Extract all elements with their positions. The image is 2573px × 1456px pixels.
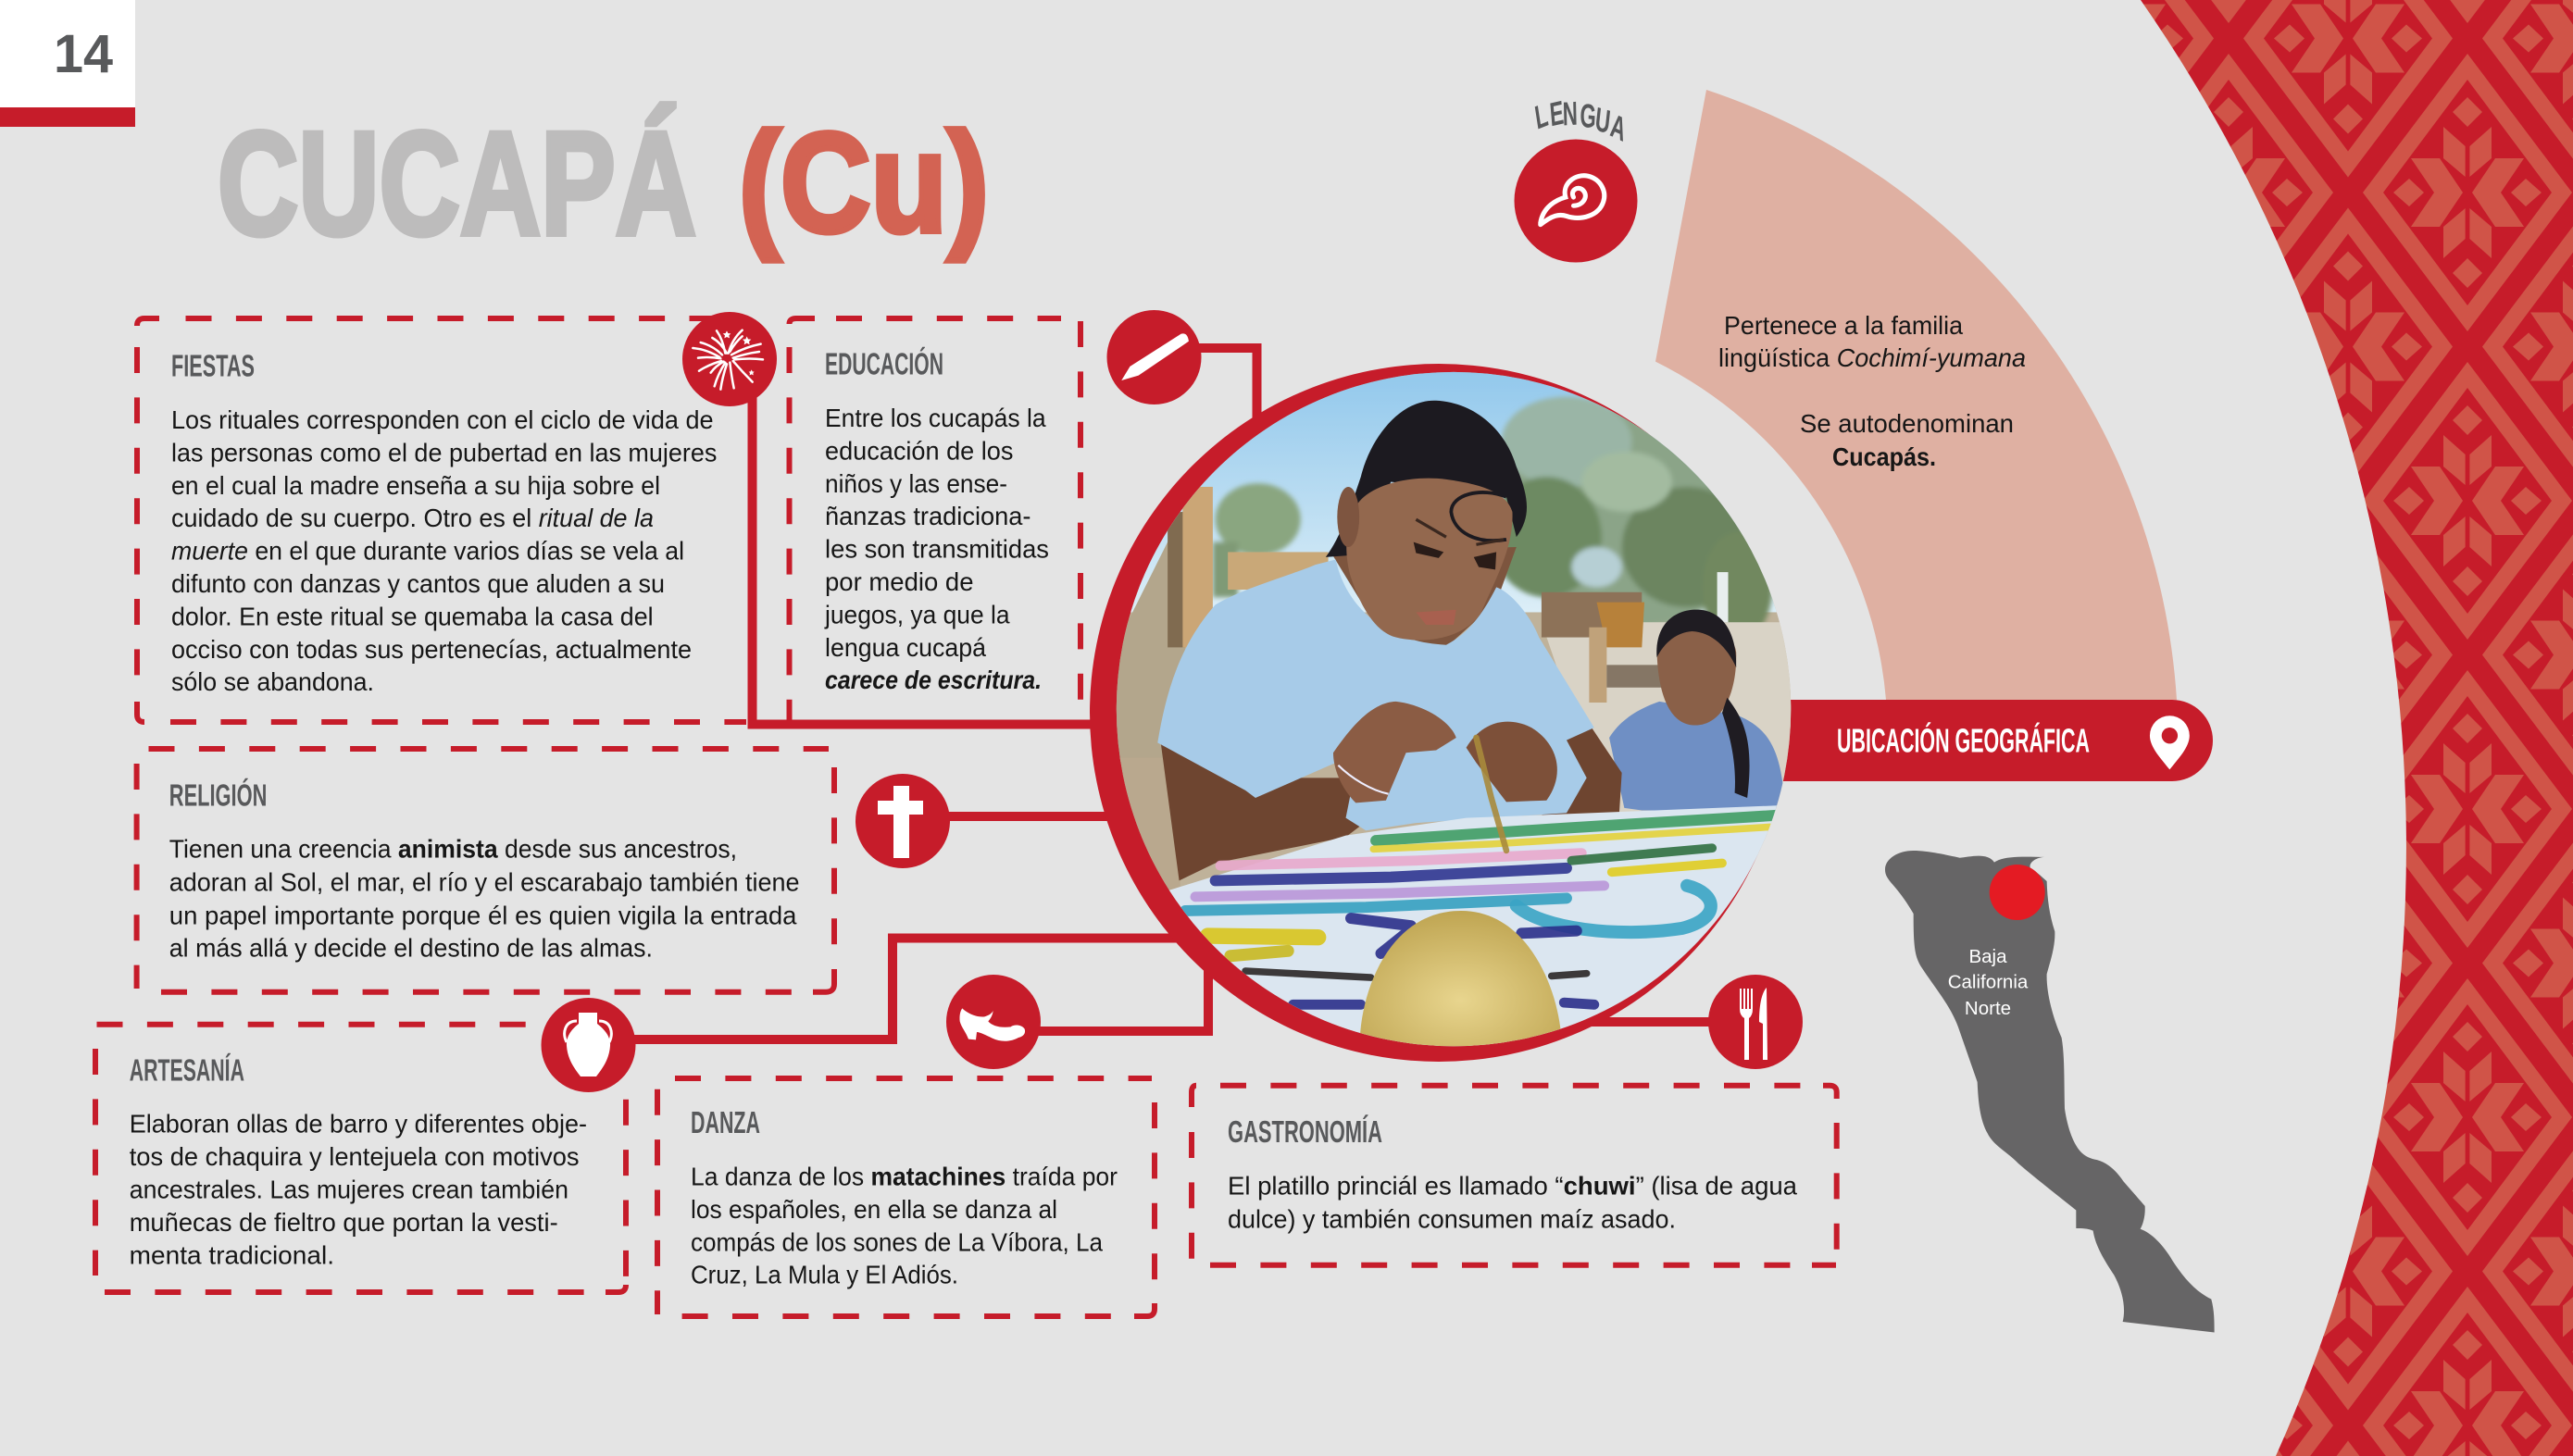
heading: artesanía: ARTESANÍA [130,1053,244,1088]
text: fiestas: occiso con todas sus pertenecías, actualmente [171,635,692,664]
text: artesanía: menta tradicional. [130,1241,334,1270]
map marker [1990,865,2045,920]
banner: ubicación geográfica [1759,700,2213,781]
panel: gastronomía [1192,1086,1837,1265]
icon: amphora [541,998,635,1092]
text: fiestas [171,405,717,696]
text: educación: juegos, ya que la [824,600,1010,628]
text: fiestas: dolor. En este ritual se quemaba la casa del [171,602,654,630]
connectors to the photo [630,348,1713,1039]
page number tab: 14 [54,24,113,84]
background: red woven pattern band [2074,0,2573,1456]
text: fiestas: sólo se abandona. [171,667,374,696]
text: religión: un papel importante porque él es quien vigila la entrada [169,901,797,929]
text: religión: Tienen una creencia animista desde sus ancestros, [169,835,737,864]
page number tab [0,0,135,127]
map: Baja California Norte [1885,851,2215,1333]
title: (Cu) [739,104,989,262]
text: fiestas: difunto con danzas y cantos que aluden a su [171,569,665,598]
text: educación: Entre los cucapás la [825,404,1046,432]
text: fiestas: en el cual la madre enseña a su hija sobre el [171,471,660,500]
panel: religión [137,749,834,992]
text: lengua [1718,311,2026,471]
text: danza [691,1163,1118,1289]
text: danza: compás de los sones de La Víbora, La [691,1227,1104,1256]
icon: pencil [1107,310,1202,404]
text: lengua: lingüística Cochimí-yumana [1718,343,2026,372]
panel: artesanía [95,1025,626,1292]
heading: educación: EDUCACIÓN [825,346,943,381]
title: CUCAPÁ [218,101,696,266]
heading: fiestas: FIESTAS [171,348,255,383]
photo: woman and girl beading at a table [1090,364,1792,1062]
text: educación: lengua cucapá [825,633,987,662]
text: educación: educación de los [825,436,1013,465]
panel: fiestas [137,318,746,722]
map label: California [1948,972,2029,992]
text: gastronomía: El platillo princiál es llamado “chuwi” (lisa de agua [1228,1172,1798,1201]
text: lengua: Cucapás. [1832,442,1936,471]
text: fiestas: muerte en el que durante varios días se vela al [171,537,684,566]
background trees and yard [1213,396,1772,642]
heading: lengua: LENGUA [1532,94,1629,149]
text: educación: por medio de [825,567,974,596]
heading: religión: RELIGIÓN [169,778,267,813]
banner: ubicación geográfica: UBICACIÓN GEOGRÁFICA [1837,720,2090,759]
heading: danza: DANZA [691,1105,760,1139]
text: educación: ñanzas tradiciona- [825,502,1031,530]
text: gastronomía: dulce) y también consumen maíz asado. [1228,1205,1676,1234]
text: educación [824,404,1049,694]
text: artesanía: ancestrales. Las mujeres crean también [130,1176,568,1203]
text: fiestas: cuidado de su cuerpo. Otro es el ritual de la [171,504,654,532]
panel: lengua sector [1655,90,2177,700]
text: danza: La danza de los matachines traída por [691,1163,1118,1191]
panel: educación [789,318,1080,720]
table [1168,805,1780,1049]
text: educación: niños y las ense- [825,469,1007,498]
girl [1609,610,1785,811]
map label: Baja [1968,946,2007,967]
text: religión [169,835,800,963]
icon: cross [856,774,950,868]
text: lengua: Pertenece a la familia [1724,311,1964,340]
map label: Norte [1965,998,2011,1019]
icon: fork and knife [1708,975,1803,1069]
text: religión: adoran al Sol, el mar, el río y el escarabajo también tiene [169,868,800,896]
beads [1185,738,1775,1004]
gourd [1360,911,1562,1049]
woman [1157,401,1622,880]
text: danza: los españoles, en ella se danza al [691,1195,1057,1224]
text: fiestas: Los rituales corresponden con el ciclo de vida de [171,405,714,434]
icon: fireworks [682,312,777,406]
heading: gastronomía: GASTRONOMÍA [1228,1114,1382,1149]
text: educación: les son transmitidas [825,535,1049,564]
icon: dance shoe [946,975,1041,1069]
text: fiestas: las personas como el de pubertad en las mujeres [171,438,717,467]
text: religión: al más allá y decide el destino de las almas. [169,933,653,963]
text: artesanía: tos de chaquira y lentejuela con motivos [130,1142,580,1171]
text: artesanía [130,1109,587,1270]
icon: map pin [2150,716,2190,769]
map label [1948,946,2029,1019]
text: artesanía: Elaboran ollas de barro y diferentes obje- [130,1109,587,1138]
panel: danza [657,1078,1155,1316]
icon: speech swirl [1515,139,1637,263]
text: danza: Cruz, La Mula y El Adiós. [691,1261,958,1289]
text: lengua: Se autodenominan [1800,409,2014,438]
text: artesanía: muñecas de fieltro que portan la vesti- [130,1208,558,1237]
text: gastronomía [1228,1172,1798,1234]
text: educación: carece de escritura. [825,666,1042,694]
